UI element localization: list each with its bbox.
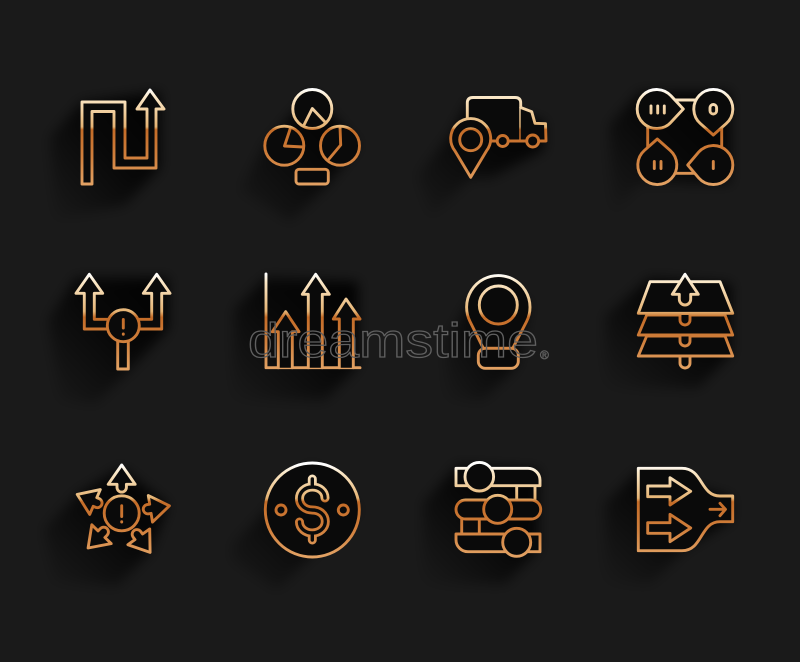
watermark: dreamstime xyxy=(248,315,538,368)
row 1 icons xyxy=(76,89,733,557)
icon: slider controls xyxy=(456,462,541,556)
icon: stacked layers with arrow xyxy=(638,274,733,368)
icon: five arrows around warning xyxy=(77,465,169,552)
icon: three pie charts and minus xyxy=(265,90,360,184)
long shadows xyxy=(44,92,731,590)
icon: growth arrow chart xyxy=(266,274,360,368)
watermark: ® xyxy=(540,348,549,362)
icon: U-turn arrow xyxy=(82,90,164,184)
icon: bottleneck with arrows xyxy=(638,468,733,551)
icon: map pin on base xyxy=(467,276,530,368)
icon: delivery truck with location pin xyxy=(451,98,546,177)
icon: fork arrows with warning xyxy=(76,274,170,369)
icon: four location pins in a cycle xyxy=(637,89,733,185)
icon: dollar coin xyxy=(265,463,359,557)
